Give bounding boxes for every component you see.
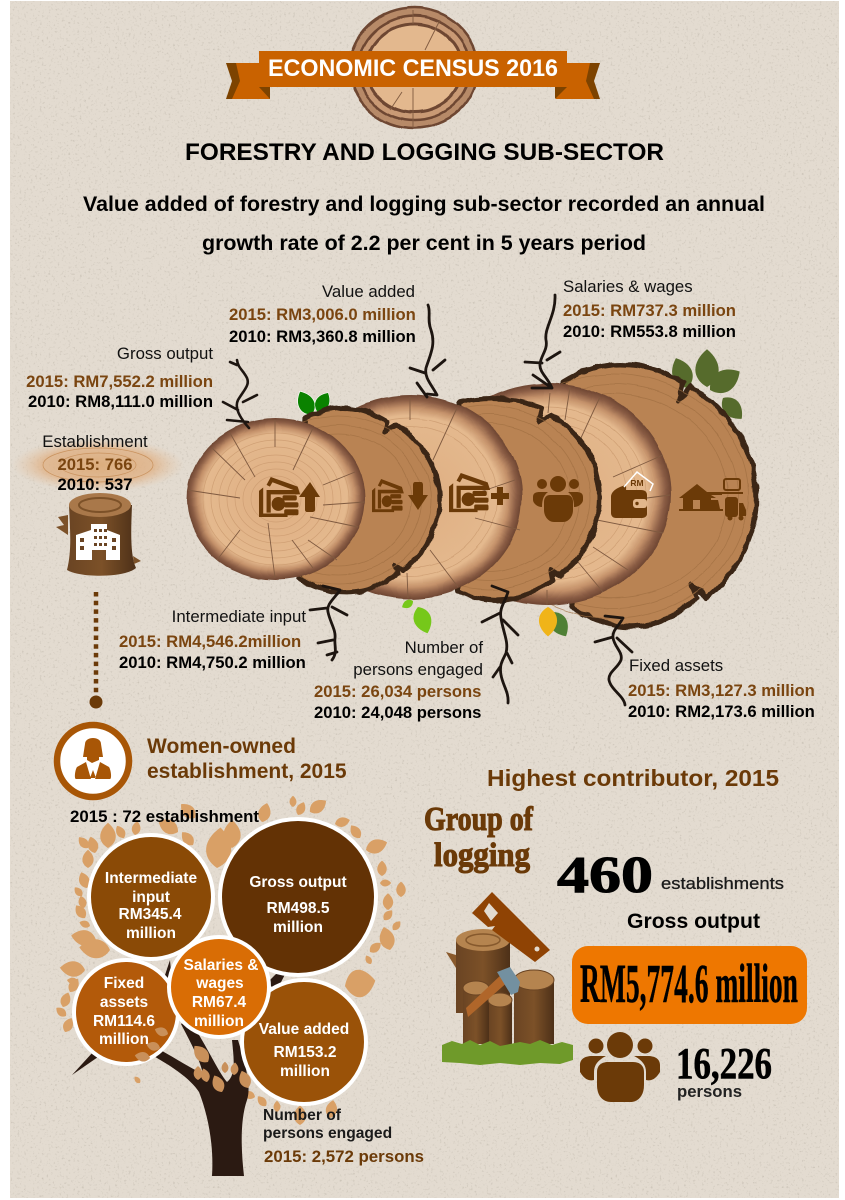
label: Intermediate input: Intermediate input bbox=[172, 607, 306, 626]
label: Establishment bbox=[42, 432, 148, 494]
log 3: value added bbox=[298, 395, 522, 599]
label: Fixed assets: 2015: RM3,127.3 million bbox=[628, 681, 815, 700]
small leaves over fixed assets bbox=[134, 1025, 169, 1063]
dotted connector bbox=[90, 592, 102, 708]
log 4: persons engaged bbox=[386, 399, 599, 600]
label: Gross output: 2015: RM7,552.2 million bbox=[26, 372, 213, 391]
heading: Women-owned establishment: Women-owned bbox=[147, 735, 296, 758]
right stump bbox=[514, 970, 554, 1044]
bubble: value added: RM153.2 bbox=[274, 1044, 336, 1061]
bubble: fixed assets: RM114.6 bbox=[93, 1013, 155, 1030]
axe bbox=[466, 967, 520, 1017]
bubble: fixed assets: assets bbox=[100, 994, 148, 1011]
log 5: salaries and wages bbox=[425, 383, 671, 605]
icon: money with down arrow bbox=[372, 479, 428, 512]
label: Intermediate input bbox=[119, 607, 306, 672]
icon: money with plus bbox=[449, 473, 509, 512]
heading: sub-sector: FORESTRY AND LOGGING SUB-SECTOR bbox=[185, 140, 664, 166]
bubble: value added: million bbox=[280, 1063, 330, 1080]
bubble: intermediate input: Intermediate bbox=[105, 870, 197, 887]
label: Intermediate input: 2015: RM4,546.2million bbox=[119, 632, 301, 651]
illustration: stumps with saw and axe bbox=[442, 892, 573, 1065]
bubble: fixed assets: Fixed bbox=[104, 975, 144, 992]
label: women persons engaged: Number of bbox=[263, 1107, 342, 1124]
saw bbox=[472, 892, 550, 962]
label: Salaries and wages bbox=[563, 277, 736, 341]
intro text: growth rate of 2.2 per cent in 5 years period bbox=[202, 231, 646, 255]
centre stump bbox=[488, 993, 512, 1048]
bubble: gross output bbox=[220, 819, 376, 975]
heading: Group of logging bbox=[424, 801, 534, 874]
label: Fixed assets: Fixed assets bbox=[629, 656, 723, 675]
label: Fixed assets: 2010: RM2,173.6 million bbox=[628, 702, 815, 721]
icon: green leaves bbox=[293, 388, 334, 419]
heading: Group of logging: Group of bbox=[424, 801, 534, 838]
log 2: intermediate input bbox=[245, 408, 439, 593]
icon: tree stump with building bbox=[56, 493, 141, 576]
left stump bbox=[463, 981, 489, 1044]
label: Salaries and wages: 2010: RM553.8 million bbox=[563, 322, 736, 341]
stat: 16,226 persons: persons bbox=[677, 1082, 742, 1101]
stat: 460 establishments: establishments bbox=[661, 874, 784, 893]
icon: tree-ring log behind banner bbox=[350, 8, 478, 128]
roots above logs bbox=[223, 295, 560, 428]
label: Salaries and wages: Salaries & wages bbox=[563, 277, 693, 296]
stat: 16,226 persons bbox=[676, 1039, 772, 1101]
stat: 460 establishments: 460 bbox=[557, 847, 653, 904]
tree trunk and branches bbox=[72, 955, 295, 1176]
label: Gross output: Gross output bbox=[117, 344, 213, 363]
icon: businesswoman bbox=[57, 725, 129, 797]
label: Intermediate input: 2010: RM4,750.2 million bbox=[119, 653, 306, 672]
label: women persons engaged: persons engaged bbox=[263, 1125, 392, 1142]
log 1: gross output bbox=[187, 418, 365, 580]
bubble: intermediate input bbox=[89, 835, 213, 959]
label: Value added: 2010: RM3,360.8 million bbox=[229, 327, 416, 346]
icon: light green leaf bbox=[400, 598, 436, 636]
intro text: Value added of forestry and logging sub-sector recorded an annual bbox=[83, 192, 765, 216]
bubble: intermediate input: RM345.4 bbox=[119, 906, 182, 923]
heading: Group of logging: logging bbox=[434, 837, 530, 874]
label: women persons engaged bbox=[263, 1107, 424, 1166]
banner title text: ECONOMIC CENSUS 2016 bbox=[268, 55, 558, 82]
icon: wallet: RM bbox=[630, 478, 644, 488]
bubble: salaries and wages: Salaries & bbox=[184, 957, 258, 974]
stat: 16,226 persons: 16,226 bbox=[676, 1039, 772, 1088]
label: Gross output: Gross output bbox=[627, 910, 760, 933]
icon: people in log bbox=[533, 476, 583, 522]
intro text bbox=[83, 192, 765, 255]
label: Value added: 2015: RM3,006.0 million bbox=[229, 305, 416, 324]
tree leaves on trunk bbox=[190, 1042, 253, 1094]
icon: people bbox=[580, 1032, 660, 1102]
label: Gross output: 2010: RM8,111.0 million bbox=[28, 392, 213, 411]
log 6: fixed assets bbox=[478, 364, 756, 627]
bubble: value added bbox=[242, 980, 366, 1104]
tree leaves bbox=[54, 796, 406, 1125]
label: Gross output bbox=[26, 344, 213, 411]
icon: house, car and equipment bbox=[679, 479, 746, 520]
stat: 460 establishments bbox=[557, 847, 784, 904]
label: Salaries and wages: 2015: RM737.3 million bbox=[563, 301, 736, 320]
bubble: gross output: million bbox=[273, 919, 323, 936]
label: women persons engaged: 2015: 2,572 persons bbox=[264, 1147, 424, 1166]
label: Establishment: Establishment bbox=[42, 432, 148, 451]
icon: olive leaves bbox=[667, 349, 748, 425]
bubble: gross output: Gross output bbox=[249, 874, 347, 891]
icon: money with up arrow bbox=[259, 477, 320, 517]
label: Value added: Value added bbox=[322, 282, 415, 301]
icon: wallet bbox=[611, 472, 653, 518]
label: Establishment: 2015: 766 bbox=[58, 455, 132, 474]
glow behind establishment bbox=[12, 438, 184, 492]
label: Number of persons engaged bbox=[314, 638, 483, 722]
callout: gross output value bbox=[572, 946, 807, 1024]
bubble: fixed assets: million bbox=[99, 1031, 149, 1048]
bubble: fixed assets bbox=[74, 960, 178, 1064]
roots below logs bbox=[310, 586, 632, 705]
grass bbox=[442, 1040, 573, 1065]
label: Value added bbox=[229, 282, 416, 346]
bubble: salaries and wages: wages bbox=[195, 975, 244, 992]
bubble: gross output: RM498.5 bbox=[267, 900, 330, 917]
label: Number of persons engaged: Number of bbox=[405, 638, 483, 657]
icon: yellow and green leaves bbox=[539, 607, 573, 641]
bubble: intermediate input: million bbox=[126, 925, 176, 942]
bubble: salaries and wages: RM67.4 bbox=[192, 994, 247, 1011]
label: Establishment: 2010: 537 bbox=[58, 475, 132, 494]
bubble: value added: Value added bbox=[259, 1021, 349, 1038]
heading: Women-owned establishment: establishment, 2015 bbox=[147, 760, 347, 783]
heading: Women-owned establishment bbox=[147, 735, 347, 783]
bubble: salaries and wages: million bbox=[194, 1013, 244, 1030]
label: Number of persons engaged: 2010: 24,048 persons bbox=[314, 703, 481, 722]
banner: Economic Census 2016 bbox=[226, 51, 600, 99]
bubble: intermediate input: input bbox=[132, 889, 170, 906]
label: Number of persons engaged: persons engaged bbox=[353, 660, 483, 679]
label: 72 establishment: 2015 : 72 establishment bbox=[70, 807, 259, 826]
bubble: salaries and wages bbox=[169, 937, 269, 1037]
label: Fixed assets bbox=[628, 656, 815, 721]
panel: women-owned tree bbox=[54, 796, 406, 1176]
logs group bbox=[187, 364, 756, 627]
label: Number of persons engaged: 2015: 26,034 persons bbox=[314, 682, 481, 701]
back stump bbox=[446, 929, 510, 1013]
heading: Highest contributor: Highest contributor, 2015 bbox=[487, 765, 779, 791]
